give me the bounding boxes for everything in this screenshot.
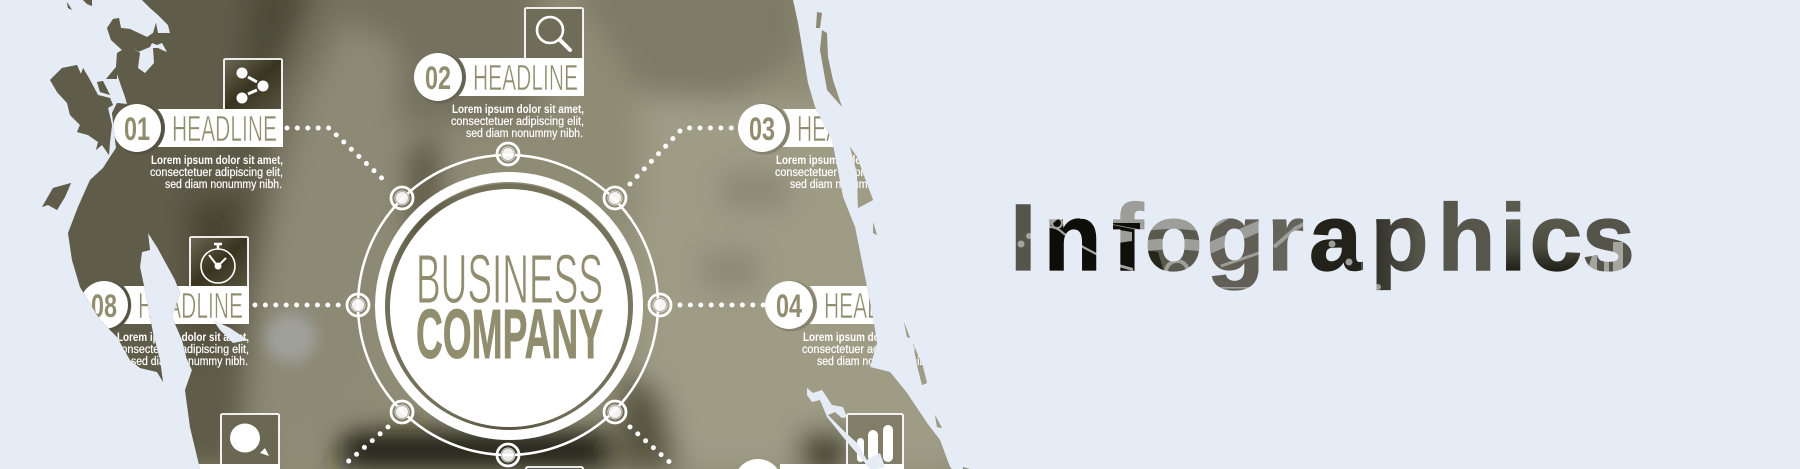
item 03 bbox=[738, 104, 868, 188]
body text: sed diam nonummy nibh. bbox=[131, 356, 248, 368]
body text: sed diam nonummy nibh. bbox=[790, 179, 907, 191]
body text: Lorem ipsum dolor sit amet, bbox=[452, 104, 584, 116]
body text: sed diam nonummy nibh. bbox=[165, 179, 282, 191]
body text: consectetuer adipiscing elit, bbox=[116, 344, 249, 356]
body text bbox=[150, 155, 283, 191]
dotted connectors bbox=[255, 128, 765, 466]
body text: sed diam nonummy nibh. bbox=[466, 128, 583, 140]
headline bar: HEADLINE bbox=[824, 285, 929, 326]
body text: sed diam nonummy nibh. bbox=[817, 356, 934, 368]
item 07: chat icon bbox=[190, 414, 280, 469]
body text: consectetuer adipiscing elit, bbox=[775, 167, 908, 179]
body text bbox=[451, 104, 584, 140]
number badge bbox=[80, 280, 132, 332]
item 04 bbox=[765, 280, 935, 368]
number badge bbox=[738, 104, 790, 154]
body text bbox=[116, 332, 249, 368]
body text: Lorem ipsum dolor sit amet, bbox=[776, 155, 908, 167]
water cut-outs in the map bbox=[133, 23, 885, 469]
body text: Lorem ipsum dolor sit amet, bbox=[803, 332, 935, 344]
item 05: bar chart icon bbox=[738, 414, 904, 469]
inner disc bbox=[390, 189, 628, 427]
icon box: share bbox=[224, 59, 282, 109]
hub nodes bbox=[347, 143, 671, 466]
number badge: 02 bbox=[425, 60, 451, 96]
title: Infographics: Infographics bbox=[1010, 185, 1635, 291]
headline bar: HEADLINE bbox=[797, 108, 902, 149]
icon box: search bbox=[525, 8, 583, 58]
headline bar: HEADLINE bbox=[172, 108, 277, 149]
icon box: stopwatch bbox=[190, 237, 248, 287]
number badge: 04 bbox=[776, 288, 802, 324]
headline bar bbox=[459, 57, 584, 98]
body text bbox=[775, 155, 868, 188]
number badge bbox=[113, 104, 164, 154]
hub title: BUSINESS bbox=[416, 240, 603, 318]
outer thin ring bbox=[358, 155, 658, 455]
item 06: top of icon box bbox=[526, 467, 583, 469]
body text: Lorem ipsum dolor sit amet, bbox=[117, 332, 249, 344]
ring shadow bbox=[388, 186, 630, 430]
headline bar bbox=[124, 285, 249, 326]
hub title: COMPANY bbox=[416, 295, 603, 373]
body text: consectetuer adipiscing elit, bbox=[150, 167, 283, 179]
number badge: 03 bbox=[749, 111, 775, 147]
hub title bbox=[417, 254, 603, 359]
headline bar: HEADLINE bbox=[138, 285, 243, 326]
body text: consectetuer adipiscing elit, bbox=[451, 116, 584, 128]
map-shaped photo panel bbox=[0, 0, 1000, 469]
number badge bbox=[414, 52, 466, 104]
central hub bbox=[358, 155, 658, 455]
number badge bbox=[765, 280, 816, 332]
number badge: 08 bbox=[91, 288, 117, 324]
item 01 bbox=[113, 59, 283, 191]
number badge: 01 bbox=[124, 111, 150, 147]
body text bbox=[802, 332, 922, 366]
headline bar bbox=[158, 108, 283, 149]
item 08 bbox=[80, 237, 249, 368]
thick ring bbox=[380, 177, 638, 435]
blurred building photo bbox=[0, 0, 1000, 469]
item 02 bbox=[414, 8, 584, 140]
body text: consectetuer adipiscing elit, bbox=[802, 344, 935, 356]
headline bar bbox=[810, 286, 905, 324]
headline bar bbox=[782, 109, 834, 147]
body text: Lorem ipsum dolor sit amet, bbox=[151, 155, 283, 167]
headline bar: HEADLINE bbox=[473, 57, 578, 98]
